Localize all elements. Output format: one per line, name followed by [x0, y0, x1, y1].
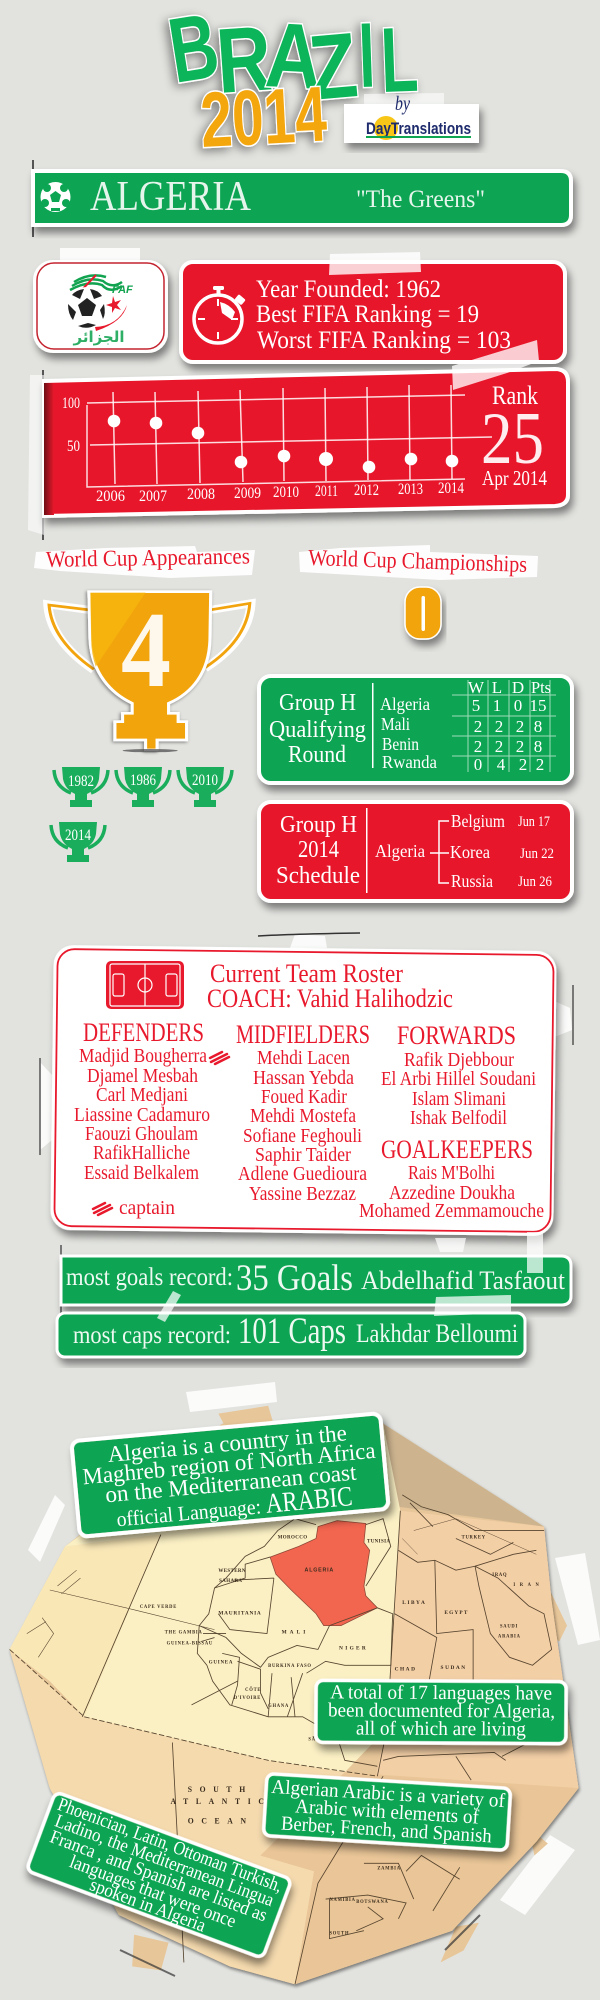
logo: Day Translations: by — [395, 93, 410, 115]
card: about Algeria: Maghreb region of North Africa — [81, 1438, 376, 1489]
arrow: schedule bracket — [430, 821, 449, 883]
icon: football pitch — [106, 961, 184, 1009]
icon: trophy 2010: 2010 — [192, 772, 218, 789]
list: midfielders: Sofiane Feghouli — [243, 1125, 362, 1147]
banner: Algeria The Greens: ALGERIA — [90, 174, 252, 220]
map labels: SOUTH — [188, 1785, 253, 1794]
table: group standings: 4 — [497, 755, 506, 774]
map labels: SAUDI — [500, 1625, 518, 1630]
chart: FIFA rank by year: 50 — [67, 438, 80, 455]
chart: FIFA rank by year: 2007 — [139, 488, 167, 505]
panel: most caps record: Lakhdar Belloumi — [356, 1319, 518, 1348]
map labels: BOTSWANA — [356, 1900, 389, 1905]
card: historic languages — [26, 1792, 292, 1959]
map labels: CAPE VERDE — [140, 1605, 177, 1610]
list: midfielders: Yassine Bezzaz — [249, 1183, 356, 1205]
list: goalkeepers: Rais M'Bolhi — [408, 1162, 495, 1184]
list: goalkeepers: Azzedine Doukha — [389, 1182, 515, 1204]
tabs: map paper tabs — [132, 1406, 567, 1970]
table: group standings: 0 — [514, 696, 522, 715]
list: defenders: Djamel Mesbah — [87, 1065, 198, 1087]
panel: qualifying round: Qualifying — [269, 717, 366, 743]
panel: team roster — [50, 945, 557, 1236]
list: midfielders: MIDFIELDERS — [236, 1020, 370, 1049]
map labels: ZAMBIA — [377, 1866, 401, 1871]
map labels: GUINEA-BISSAU — [167, 1642, 213, 1647]
panel: most goals record — [60, 1245, 571, 1315]
list: midfielders: Mehdi Lacen — [257, 1047, 350, 1069]
list: forwards: Islam Slimani — [412, 1088, 506, 1110]
icon: stopwatch — [194, 286, 246, 343]
map labels: EGYPT — [444, 1610, 469, 1616]
list: defenders — [74, 1018, 210, 1184]
map labels — [140, 1534, 543, 1937]
icon: FAF crest: FAF — [112, 284, 133, 296]
map labels: ARABIA — [498, 1634, 521, 1640]
map labels: TUNISIA — [367, 1538, 390, 1544]
list: goalkeepers — [359, 1135, 544, 1222]
icon: trophy 1986 — [116, 767, 170, 807]
list: midfielders — [236, 1020, 370, 1205]
card: historic languages: spoken in Algeria — [87, 1874, 209, 1937]
tape: bottom accents — [120, 1915, 480, 1976]
title: Brazil 2014: Z — [305, 14, 361, 120]
card: historic languages: Franca , and Spanish are listed as — [47, 1826, 270, 1926]
legend: captain — [93, 1197, 175, 1219]
chart: FIFA rank by year: 2008 — [187, 486, 215, 503]
table: group standings: 0 — [474, 755, 482, 774]
icon: big trophy with 4 appearances: 4 — [121, 591, 171, 710]
tape: roster sides — [40, 985, 573, 1155]
logo: Day Translations: DayTranslations — [366, 119, 471, 138]
map labels: SAHARA — [219, 1578, 242, 1584]
card: about Algeria: Algeria is a country in the — [107, 1420, 348, 1467]
title: Brazil 2014: L — [379, 7, 420, 112]
list: defenders: Essaid Belkalem — [84, 1162, 199, 1184]
icon: trophy 2014: 2014 — [65, 827, 91, 844]
panel: qualifying round: Round — [288, 742, 346, 768]
icon: FAF crest — [67, 275, 133, 346]
chart: FIFA rank by year: 2009 — [234, 485, 261, 502]
map region: Algeria highlighted — [270, 1521, 377, 1626]
panel: group schedule: Russia — [451, 871, 493, 891]
table: group standings: 15 — [530, 696, 546, 715]
table: group standings: 2 — [536, 755, 544, 774]
panel: most goals record: 35 Goals — [236, 1258, 353, 1299]
card: historic languages: Ladino, the Mediterranean Lingua — [52, 1811, 277, 1911]
callout: current rank — [481, 381, 547, 490]
panel: qualifying round: Rwanda — [382, 752, 437, 772]
list: defenders: Madjid Bougherra — [79, 1045, 207, 1067]
heading: World Cup Championships: World Cup Championships — [308, 545, 528, 577]
card: historic languages: Phoenician, Latin, Ottoman Turkish, — [55, 1794, 285, 1897]
panel: most goals record: most goals record: — [66, 1264, 233, 1291]
icon: captain mark — [210, 1052, 229, 1064]
panel: federation stats: Worst FIFA Ranking = 103 — [257, 327, 511, 354]
map labels: D'IVOIRE — [234, 1696, 261, 1701]
chart: FIFA rank by year: 100 — [62, 395, 80, 412]
icon: soccer ball — [40, 182, 70, 212]
map lines — [10, 1495, 552, 1984]
chart: FIFA rank by year: 2014 — [438, 480, 464, 497]
table: group standings: W — [468, 678, 485, 697]
tape: chart corner — [452, 340, 539, 390]
callout: current rank: Rank — [492, 381, 538, 410]
card: seventeen languages: been documented for Algeria, — [328, 1699, 555, 1723]
card: historic languages: languages that were once — [67, 1851, 239, 1932]
map labels: MOROCCO — [278, 1534, 307, 1541]
chart: FIFA rank by year: 2010 — [273, 484, 299, 501]
table: group standings: 2 — [516, 737, 524, 756]
card: about Algeria: ARABIC — [264, 1481, 354, 1520]
table: group standings: Pts — [531, 678, 551, 697]
card: Algerian Arabic: Arabic with elements of — [295, 1795, 480, 1829]
chart: FIFA rank by year: 2012 — [354, 482, 379, 499]
panel: group schedule — [259, 802, 572, 901]
card: seventeen languages: A total of 17 languages have — [330, 1681, 552, 1705]
tape: stats panel top — [329, 252, 421, 275]
map labels: WESTERN — [218, 1568, 246, 1574]
map labels: ATLANTIC — [170, 1797, 272, 1806]
map labels: OCEAN — [188, 1817, 254, 1826]
table: group standings: 2 — [495, 717, 503, 736]
list: forwards: Rafik Djebbour — [404, 1049, 514, 1071]
map labels: BURKINA FASO — [268, 1664, 312, 1669]
callout: current rank: 25 — [481, 398, 544, 480]
panel: qualifying round: Group H — [279, 690, 356, 716]
panel: group schedule: Jun 17 — [518, 814, 550, 830]
panel: most goals record: Abdelhafid Tasfaout — [361, 1266, 566, 1295]
map labels: LIBYA — [402, 1600, 426, 1606]
icon: FAF crest: الجزائر — [72, 328, 125, 346]
legend: captain: captain — [119, 1197, 175, 1219]
list: defenders: Carl Medjani — [96, 1084, 188, 1106]
card: Algerian Arabic: Berber, French, and Spanish — [280, 1813, 492, 1847]
panel: qualifying round: Algeria — [380, 694, 430, 714]
table: group standings — [452, 678, 556, 774]
icon: trophy 1982: 1982 — [68, 773, 94, 790]
table: group standings: D — [512, 678, 524, 697]
table: group standings: 1 — [493, 696, 501, 715]
icon: big trophy with 4 appearances — [48, 591, 251, 752]
panel: group schedule: Belgium — [451, 811, 505, 831]
title: Brazil 2014: A — [263, 4, 324, 109]
panel: most caps record — [57, 1311, 525, 1357]
table: group standings: L — [492, 678, 502, 697]
icon: trophy 1982 — [54, 767, 108, 807]
map labels: CHAD — [395, 1666, 416, 1672]
map labels: SOUTH — [329, 1932, 349, 1937]
table: group standings: 2 — [474, 717, 482, 736]
panel: group schedule: Jun 22 — [520, 846, 554, 862]
card: about Algeria — [71, 1413, 389, 1537]
chart: FIFA rank by year — [62, 385, 492, 505]
table: group standings: 2 — [516, 717, 524, 736]
map labels: GHANA — [268, 1704, 289, 1709]
map labels: GUINEA — [209, 1659, 233, 1665]
table: group standings: 2 — [519, 755, 527, 774]
map labels: IRAN — [513, 1583, 543, 1588]
map labels: NAMIBIA — [329, 1898, 356, 1903]
icon: trophy 2010 — [178, 767, 232, 807]
banner: Algeria The Greens — [32, 160, 571, 237]
card: seventeen languages — [316, 1680, 566, 1744]
panel: federation stats: Year Founded: 1962 — [256, 276, 441, 303]
panel: group schedule: Schedule — [276, 863, 360, 889]
logo: Day Translations — [344, 93, 479, 143]
icon: trophy 2014 — [51, 822, 105, 862]
table: group standings: 8 — [534, 717, 542, 736]
list: midfielders: Mehdi Mostefa — [250, 1105, 356, 1127]
tape: record bars — [157, 1232, 543, 1322]
panel: group schedule: 2014 — [298, 837, 339, 863]
chart: FIFA rank by year: 2011 — [315, 483, 338, 500]
panel: group schedule: Algeria — [375, 841, 425, 861]
table: group standings: 2 — [495, 737, 503, 756]
map face: central cream — [10, 1424, 400, 1772]
card: Algerian Arabic: Algerian Arabic is a variety of — [271, 1776, 506, 1812]
tape: roster top — [258, 933, 360, 948]
panel: federation crest — [33, 248, 168, 353]
chart: FIFA rank by year: 2013 — [398, 481, 423, 498]
list: defenders: Faouzi Ghoulam — [85, 1123, 198, 1145]
chart: FIFA rank by year: 2006 — [96, 488, 125, 505]
map labels: NIGER — [339, 1645, 368, 1651]
panel: ranking chart — [28, 369, 568, 540]
map labels: SUDAN — [441, 1665, 467, 1671]
map: paper globe with Africa — [10, 1424, 578, 1984]
icon: trophy 1986: 1986 — [130, 772, 156, 789]
table: group standings: 8 — [534, 737, 542, 756]
map labels: TURKEY — [462, 1535, 486, 1541]
map labels: SÃO TOMÉ — [308, 1736, 339, 1743]
icon: zero championships — [405, 587, 441, 639]
map labels: MAURITANIA — [218, 1610, 262, 1617]
list: midfielders: Foued Kadir — [261, 1086, 347, 1108]
title: Brazil 2014: 2014 — [198, 70, 329, 164]
tape: map corners — [28, 1382, 600, 1915]
list: forwards: Ishak Belfodil — [410, 1107, 507, 1129]
list: goalkeepers: GOALKEEPERS — [381, 1135, 533, 1164]
list: goalkeepers: Mohamed Zemmamouche — [359, 1200, 544, 1222]
panel: most caps record: most caps record: — [73, 1322, 231, 1349]
map labels: THE GAMBIA — [165, 1631, 203, 1636]
panel: qualifying round: Benin — [382, 734, 419, 754]
heading: World Cup Appearances: World Cup Appearances — [46, 543, 250, 572]
title: Brazil 2014: I — [357, 5, 377, 107]
list: defenders: RafikHalliche — [93, 1142, 190, 1164]
title: Brazil 2014 — [162, 0, 420, 164]
card: Algerian Arabic — [263, 1774, 511, 1850]
list: midfielders: Saphir Taider — [255, 1144, 351, 1166]
panel: most caps record: 101 Caps — [238, 1311, 346, 1352]
callout: current rank: Apr 2014 — [482, 466, 547, 490]
panel: qualifying round — [259, 676, 572, 783]
list: midfielders: Adlene Guedioura — [238, 1163, 367, 1185]
panel: group schedule: Korea — [450, 842, 490, 862]
table: group standings: 5 — [472, 696, 480, 715]
list: forwards: FORWARDS — [397, 1021, 516, 1050]
banner: Algeria The Greens: "The Greens" — [356, 186, 485, 213]
map labels: MALI — [282, 1630, 308, 1636]
list: defenders: Liassine Cadamuro — [74, 1104, 210, 1126]
panel: team roster: Current Team Roster — [210, 959, 403, 988]
panel: federation stats: Best FIFA Ranking = 19 — [256, 301, 479, 328]
panel: team roster: COACH: Vahid Halihodzic — [207, 984, 453, 1013]
card: seventeen languages: all of which are living — [356, 1718, 526, 1740]
map labels: CÔTE — [245, 1687, 261, 1693]
list: forwards — [381, 1021, 536, 1129]
map region: Algeria highlighted: ALGERIA — [305, 1567, 334, 1573]
card: about Algeria: official Language: — [115, 1494, 262, 1531]
panel: federation stats — [181, 262, 565, 362]
card: about Algeria: on the Mediterranean coast — [104, 1460, 358, 1507]
list: forwards: El Arbi Hillel Soudani — [381, 1068, 536, 1090]
panel: qualifying round: Mali — [381, 714, 410, 734]
list: defenders: DEFENDERS — [83, 1018, 204, 1047]
title: Brazil 2014: R — [213, 6, 275, 113]
panel: group schedule: Jun 26 — [518, 874, 552, 890]
table: group standings: 2 — [474, 737, 482, 756]
list: midfielders: Hassan Yebda — [253, 1067, 354, 1089]
panel: group schedule: Group H — [280, 812, 357, 838]
map labels: IRAQ — [492, 1573, 507, 1578]
